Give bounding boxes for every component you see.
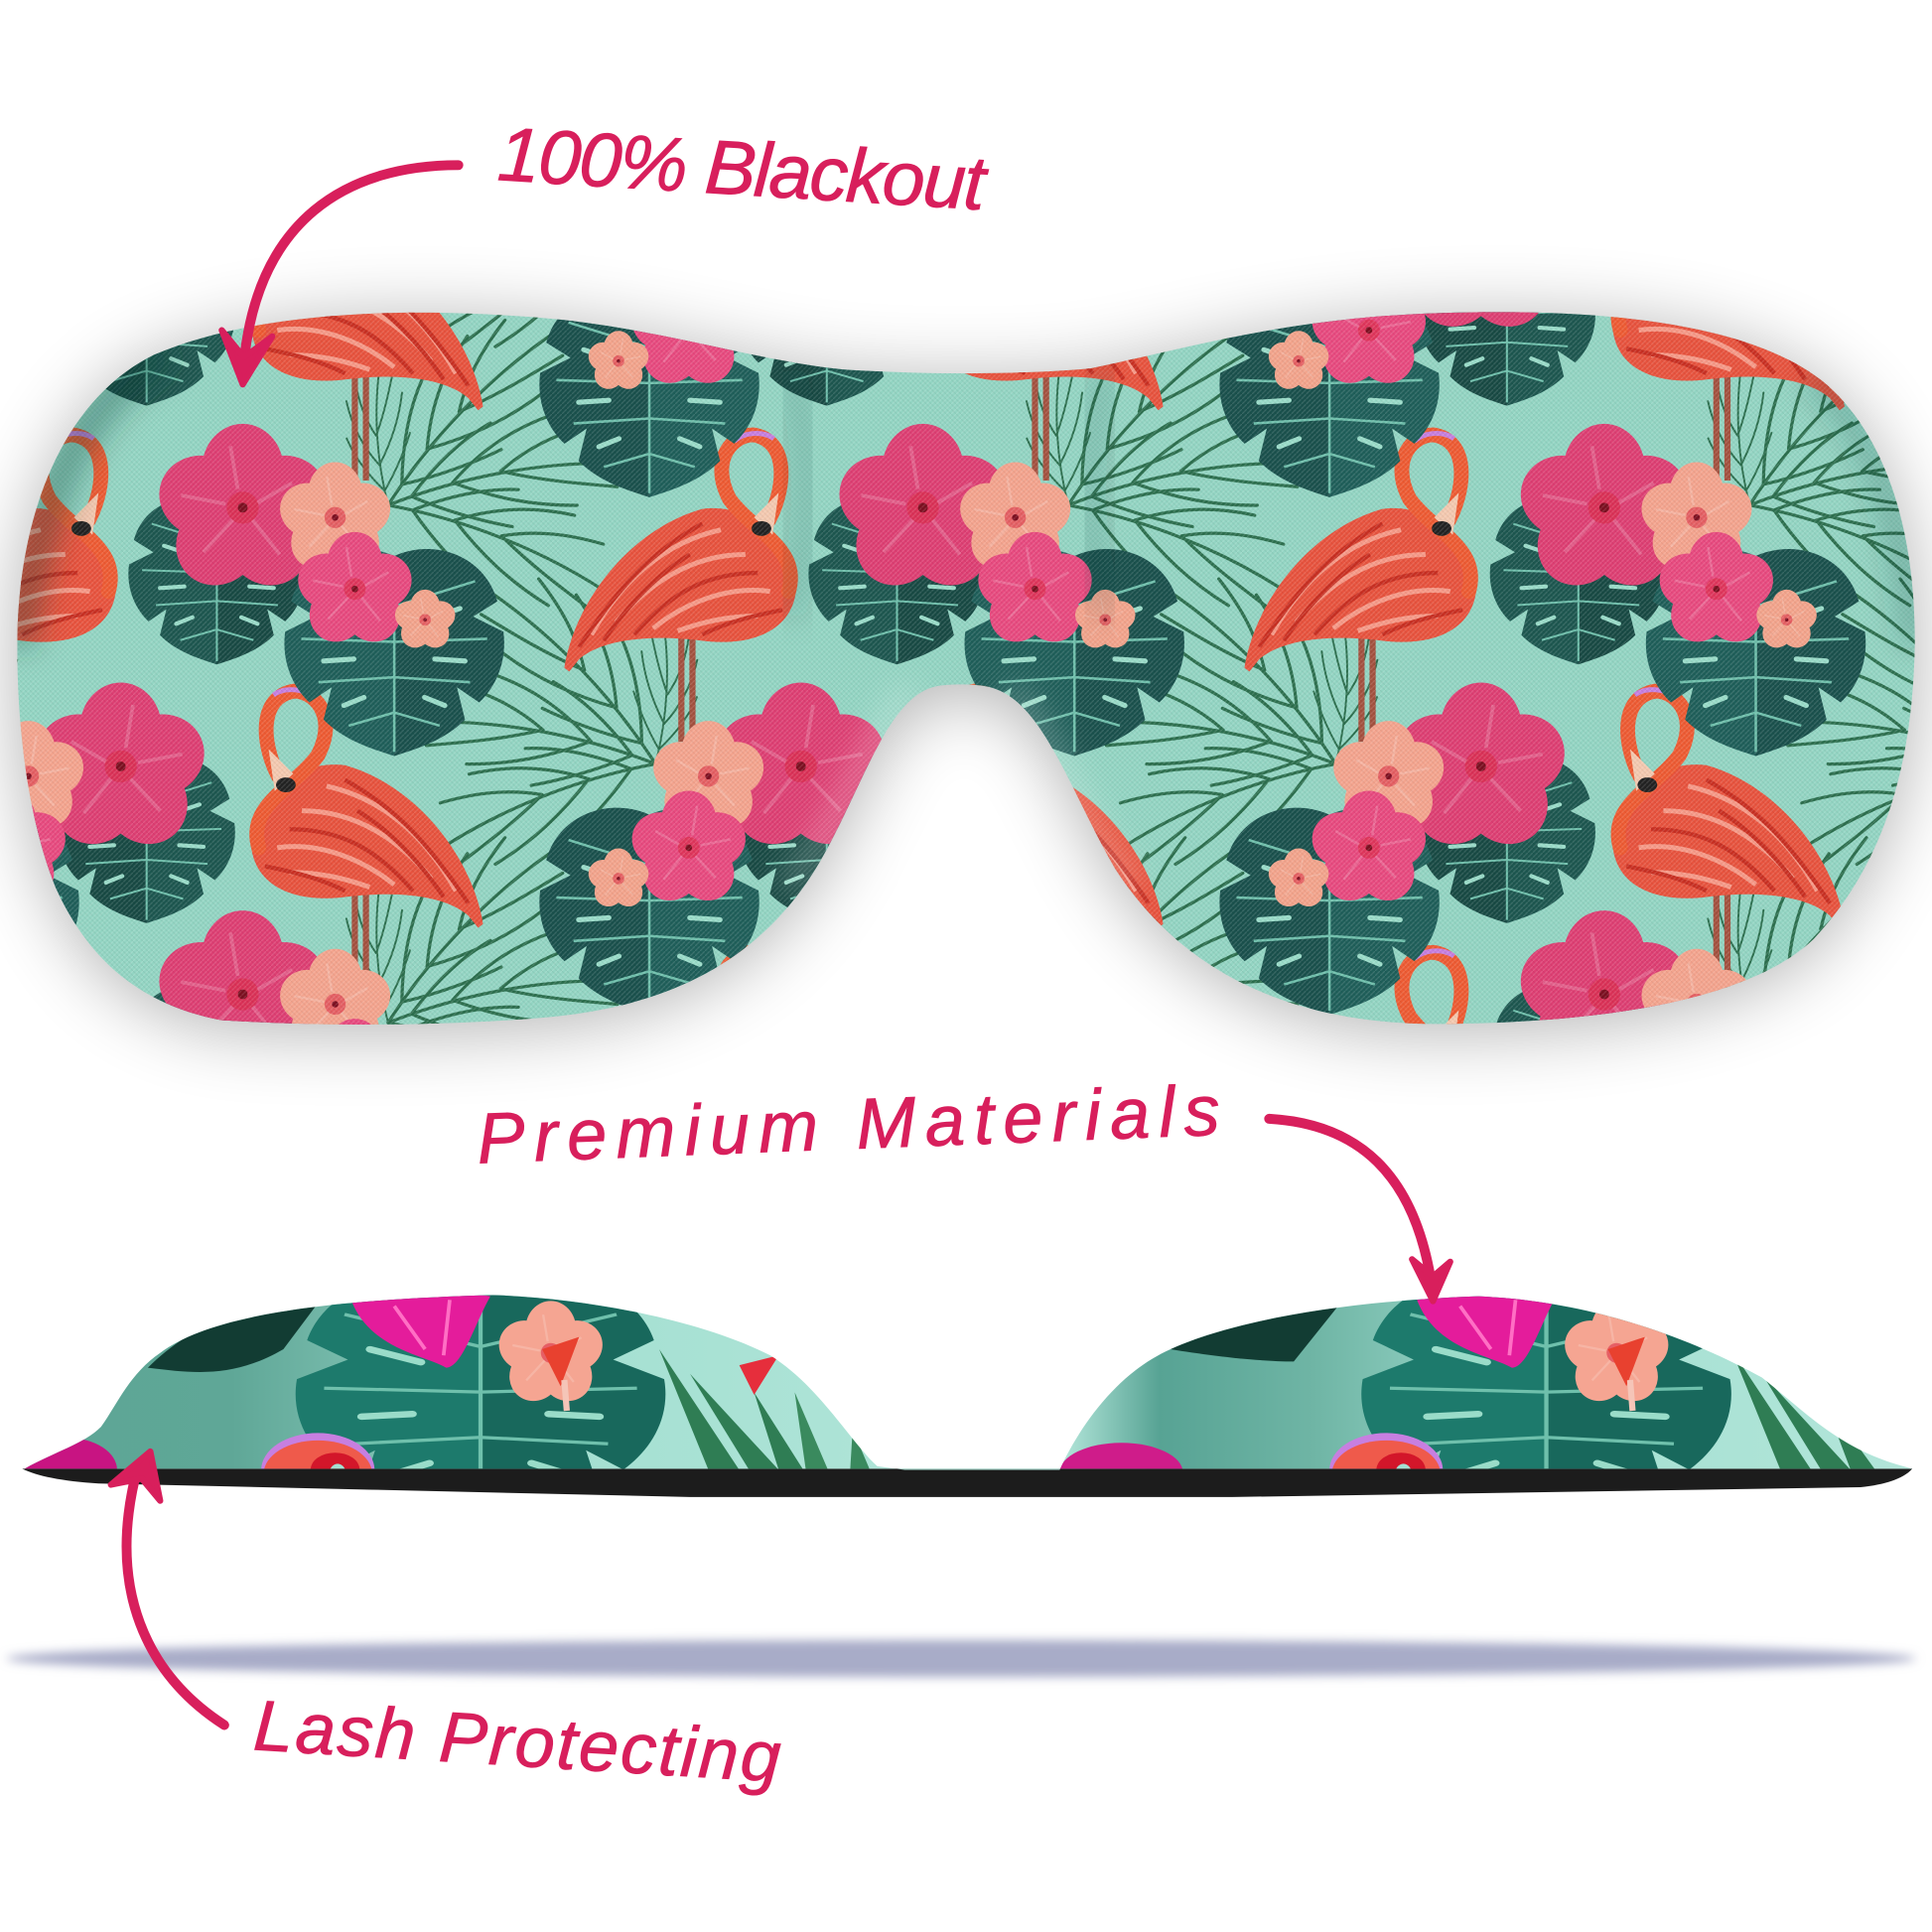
arrow: Premium Materials — [1269, 1119, 1450, 1302]
arrow: 100% Blackout — [221, 165, 459, 384]
mask base fabric — [0, 296, 1932, 1035]
left pattern — [19, 1273, 870, 1538]
sleep mask side view — [22, 1295, 1912, 1497]
sleep mask front view — [17, 312, 1915, 1025]
ground shadow — [6, 1640, 1916, 1677]
label: Lash Protecting: Lash Protecting — [251, 1686, 783, 1798]
flamingos layer — [18, 160, 1914, 1025]
side view fabric and pattern — [25, 1295, 1912, 1469]
label: 100% Blackout: 100% Blackout — [495, 111, 992, 226]
black backing strip — [22, 1468, 1912, 1497]
mask front drop shadow — [17, 320, 1915, 1032]
monstera and hibiscus layer — [18, 160, 1914, 1025]
dark shoulders — [148, 1299, 321, 1372]
arrow: Lash Protecting — [111, 1451, 224, 1725]
label: Premium Materials: Premium Materials — [476, 1071, 1221, 1179]
palm fronds layer — [18, 160, 1915, 1025]
weave texture — [0, 296, 1932, 1035]
right pattern — [1059, 1273, 1875, 1538]
padded lobe shading — [17, 351, 1915, 888]
